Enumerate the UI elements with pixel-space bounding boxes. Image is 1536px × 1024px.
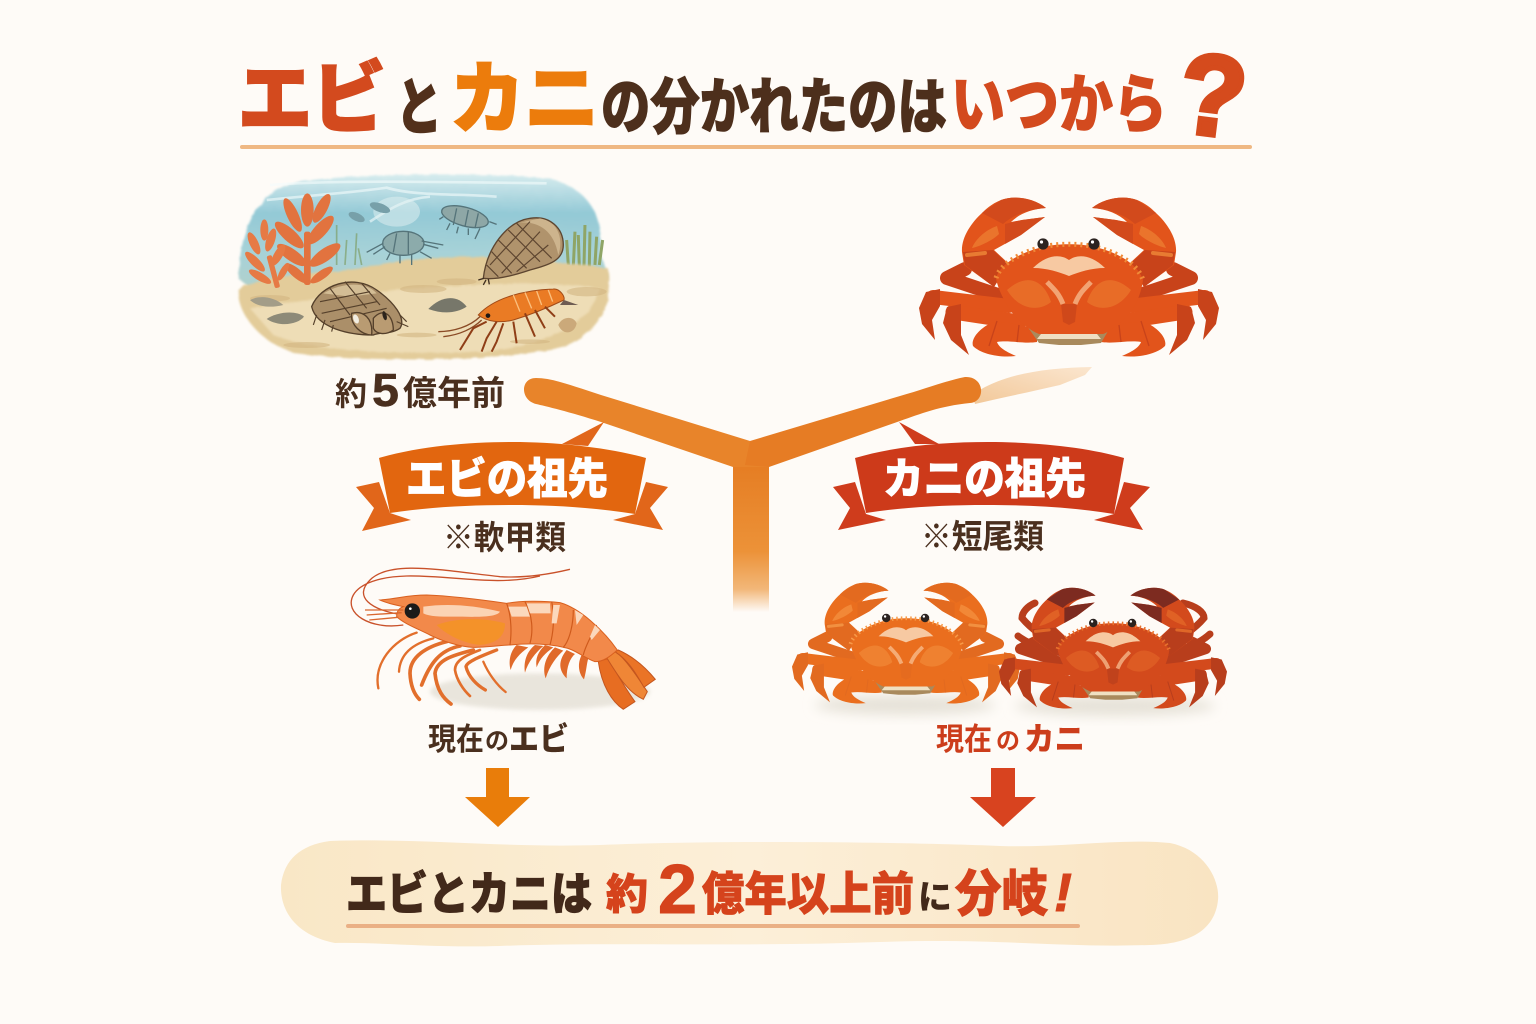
label: 約5億年前 [335,364,505,416]
banner text: カニの祖先 [883,445,1086,507]
ribbon body [855,442,1124,514]
pointer [562,422,604,446]
armored creature: right [478,218,563,285]
title: と: と [396,57,442,147]
約: 約 [335,369,367,415]
text underline [346,924,1080,928]
title: いつから: いつから [951,54,1167,146]
text: 分岐: 分岐 [955,854,1048,926]
crab shadows [815,695,995,715]
億年前: 億年前 [403,366,505,415]
title: エビ: エビ [238,37,386,149]
label: 現在のエビ [428,714,569,760]
arrow: shrimp down [465,768,530,827]
grass patch right [567,225,603,267]
illustration: ancient crab [919,198,1219,357]
の: の [996,721,1020,756]
現在: 現在 [428,714,484,759]
5: 5 [372,364,399,416]
left branch [524,378,769,467]
現在: 現在 [936,714,992,759]
distant ripple [373,197,420,227]
illustration: modern shrimp [351,568,655,710]
text: exclamation: ! [1054,863,1072,923]
right outer legs [1165,603,1210,653]
large coral [271,192,344,286]
water [238,174,608,305]
body shading [437,619,505,645]
sand texture [250,278,607,348]
text: エビとカニは: エビとカニは [346,858,592,924]
text: に: に [918,870,952,919]
stem [733,460,769,612]
banner: エビの祖先 [356,422,668,531]
illustration: ancient sea scene [238,174,609,359]
branching tree diagram [524,367,1092,612]
left outer legs [1018,603,1062,653]
sand shading [250,284,600,353]
background grass [337,225,362,265]
crab shadow right [1015,696,1215,716]
ribbon tails [356,482,668,531]
banner: カニの祖先 [833,422,1150,530]
title underline [240,145,1252,149]
face whiskers [365,610,403,620]
small swimming creatures [347,200,391,224]
orange shrimp-like creature [438,289,578,352]
の: の [485,721,509,756]
orange crab [792,583,1020,704]
segment highlights [508,603,600,640]
tail fan [598,650,655,709]
water highlights [267,182,547,222]
エビ: エビ [509,714,569,760]
pointer [899,422,939,444]
banner text: エビの祖先 [406,445,608,507]
ground shadow [430,673,650,710]
grey swimming creature: upper right [439,201,497,239]
note: ※短尾類: ※短尾類 [921,510,1044,558]
text: 2: 2 [658,850,697,928]
text: 約: 約 [606,861,648,922]
swimmerets [510,645,588,679]
right branch [745,377,981,467]
arrow: crab down [970,768,1036,827]
note: ※軟甲類: ※軟甲類 [443,511,566,559]
walking legs [378,633,506,704]
label: 現在のカニ [936,714,1085,760]
red crab [999,588,1227,709]
rocks [250,297,577,332]
panel blob [281,840,1218,946]
ribbon body [379,442,646,514]
カニ: カニ [1024,714,1085,760]
segment lines [507,602,597,655]
faint right trailing stroke [972,367,1092,404]
title [238,29,1253,163]
red crab extra upper legs [1018,603,1210,653]
eye [405,603,420,619]
conclusion panel [281,840,1218,946]
title: question mark: ? [1172,29,1253,163]
shrimp body [380,595,617,662]
armored creature: bottom left [312,282,408,335]
title: カニ: カニ [450,37,599,149]
sand floor [238,257,609,359]
antennae [351,568,570,626]
carapace highlight [423,605,500,617]
ribbon tails [833,482,1150,530]
title: の分かれたのは: の分かれたのは [601,57,947,146]
grey swimming creature: centre [367,231,443,265]
illustration: modern crabs [792,583,1227,716]
text: 億年以上前: 億年以上前 [702,858,914,924]
small coral [243,219,291,288]
